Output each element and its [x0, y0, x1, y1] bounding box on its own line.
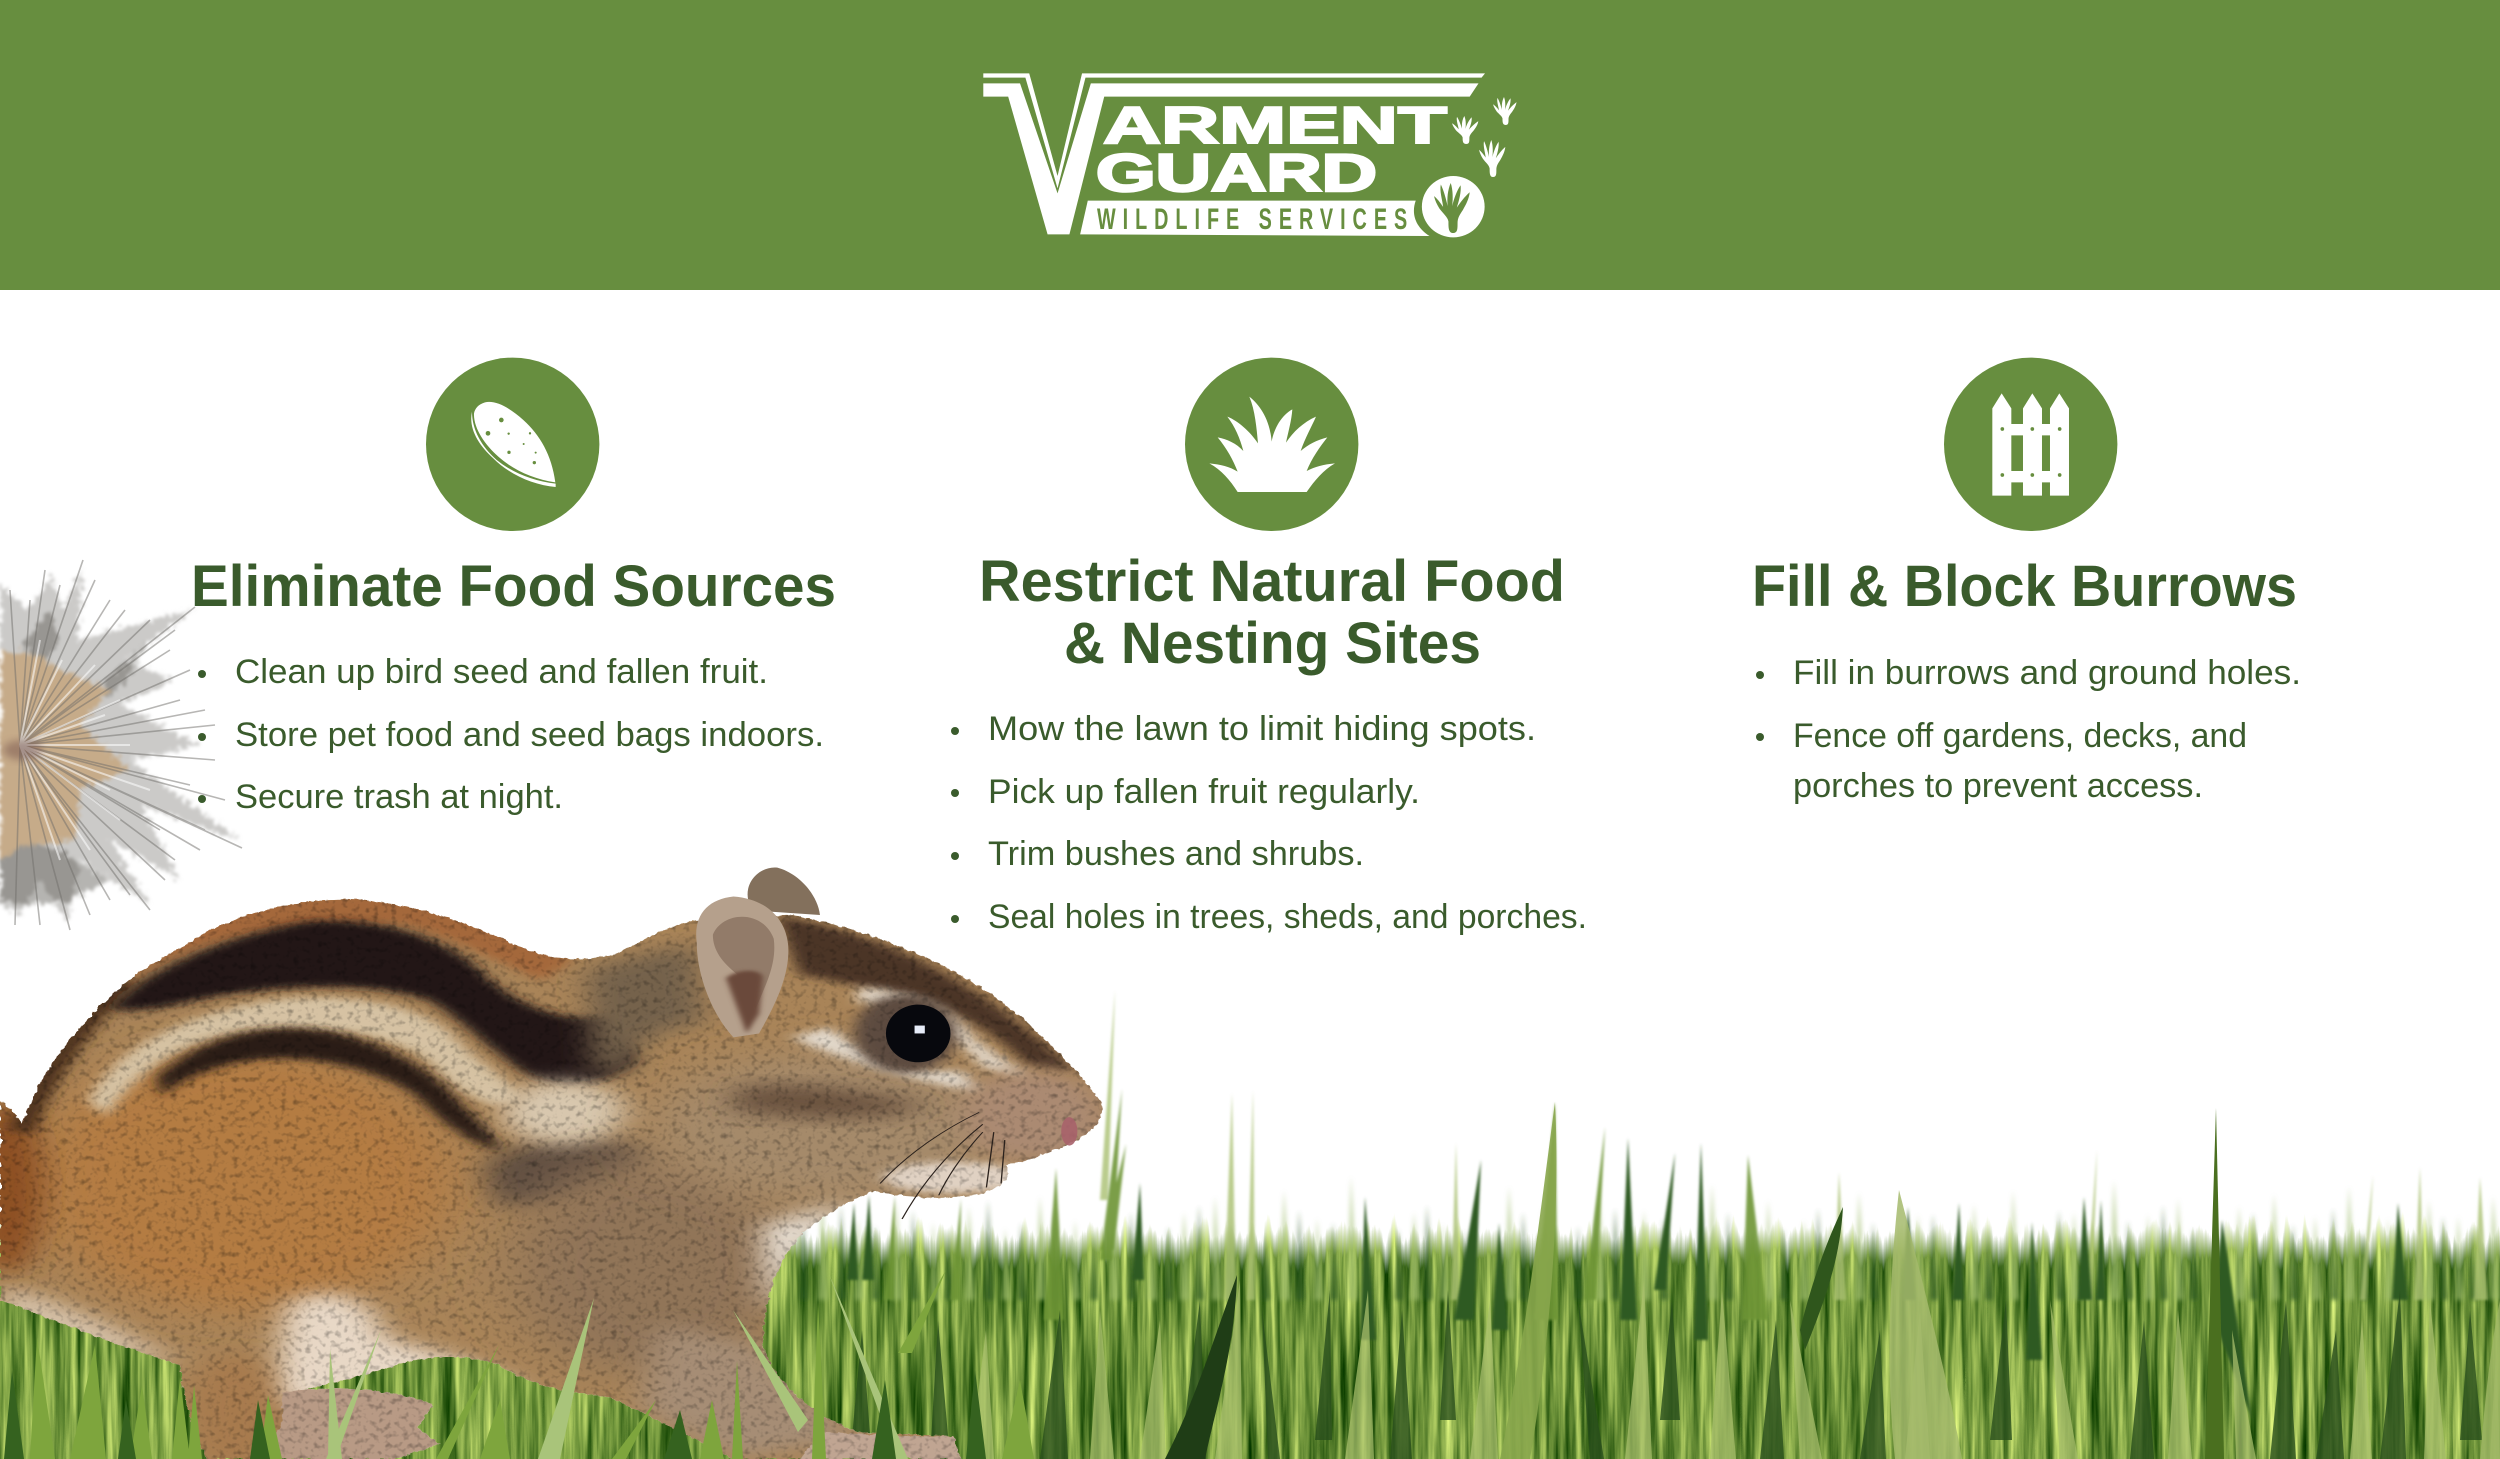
grass meadow background	[0, 990, 2500, 1459]
tail hairs	[10, 560, 242, 930]
heading: & Nesting Sites	[1064, 611, 1481, 676]
bullet list: Secure trash at night.	[235, 778, 563, 816]
icon: fence	[1944, 358, 2117, 531]
chipmunk tail	[0, 560, 242, 930]
mid grass blades light	[970, 1280, 2500, 1459]
logo V mark and banner	[983, 73, 1485, 237]
tail highlights	[20, 640, 150, 860]
wide grass leaves	[1165, 1102, 2500, 1459]
bullet list: Seal holes in trees, sheds, and porches.	[988, 898, 1587, 936]
chipmunk	[0, 840, 1150, 1459]
bullet list: Trim bushes and shrubs.	[988, 835, 1364, 873]
chipmunk eye	[886, 1005, 950, 1062]
chipmunk nose	[1061, 1117, 1077, 1146]
bullet list	[951, 710, 1587, 936]
chipmunk front ear	[696, 896, 788, 1037]
front blades dark	[4, 1370, 986, 1459]
bullet list: Clean up bird seed and fallen fruit.	[235, 653, 768, 691]
icon: almond	[426, 358, 599, 531]
bullet list: porches to prevent access.	[1793, 767, 2203, 805]
front blades pale	[326, 1274, 908, 1459]
front blades green	[30, 1270, 1034, 1459]
foreground grass blades	[4, 1270, 1034, 1459]
grass fuzzy spikes dark	[800, 1200, 2478, 1300]
logo	[983, 73, 1516, 237]
header band	[0, 0, 2500, 290]
chipmunk rear foot	[257, 1389, 440, 1459]
tall grass blades pale	[1100, 990, 2488, 1300]
chipmunk body fur	[0, 898, 1103, 1459]
bullet list: Fill in burrows and ground holes.	[1793, 654, 2301, 692]
tall grass blades olive	[884, 1089, 1768, 1320]
chipmunk back ear	[748, 867, 820, 915]
heading: Eliminate Food Sources	[191, 554, 836, 619]
heading	[979, 549, 1565, 676]
icon: grass tuft	[1185, 358, 1358, 531]
logo text GUARD: GUARD	[1096, 144, 1377, 203]
panel: restrict natural food and nesting sites	[951, 358, 1587, 936]
tail fur mass	[0, 567, 240, 923]
bullet list: Pick up fallen fruit regularly.	[988, 773, 1420, 811]
grass texture	[0, 1150, 2500, 1459]
panel: fill and block burrows	[1752, 358, 2301, 805]
panel: eliminate food sources	[191, 358, 836, 816]
bullet list: Fence off gardens, decks, and	[1793, 717, 2247, 755]
bullet list	[1756, 654, 2301, 805]
bullet list: Mow the lawn to limit hiding spots.	[988, 710, 1536, 748]
tail root	[3, 740, 43, 760]
mid grass blades dark	[850, 1290, 2482, 1459]
chipmunk whiskers	[880, 1112, 1005, 1219]
tall grass blades dark	[847, 1138, 2408, 1420]
bullet list: Store pet food and seed bags indoors.	[235, 716, 824, 754]
logo text ARMENT: ARMENT	[1103, 97, 1447, 155]
logo paw prints	[1434, 97, 1516, 233]
grass fuzzy spikes pale	[818, 1176, 2500, 1300]
chipmunk front foot	[799, 1432, 961, 1459]
heading: Restrict Natural Food	[979, 549, 1565, 614]
logo text WILDLIFE SERVICES: WILDLIFE SERVICES	[1097, 203, 1407, 236]
bullet list	[198, 653, 824, 816]
heading: Fill & Block Burrows	[1752, 554, 2297, 619]
